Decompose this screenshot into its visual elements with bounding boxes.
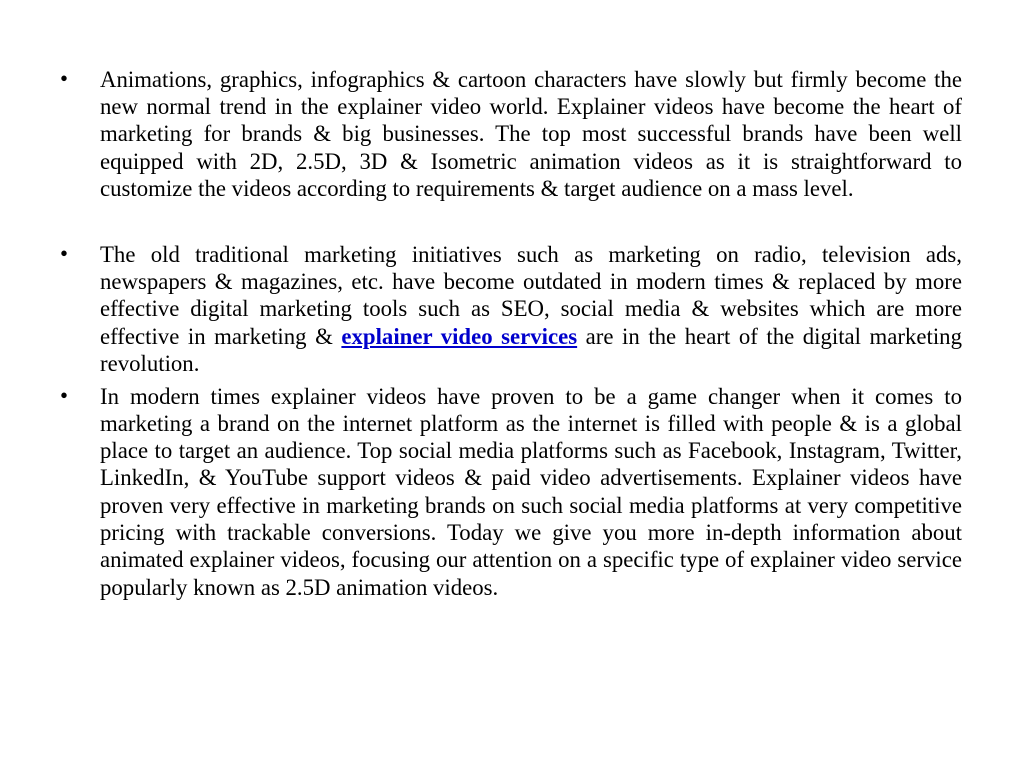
- paragraph 2 text: [100, 242, 962, 376]
- paragraph 3 text: LinkedIn, & YouTube support videos & paid video advertisements. Explainer videos have: [100, 465, 962, 490]
- paragraph 3 text: pricing with trackable conversions. Today we give you more in-depth information about: [100, 520, 962, 545]
- paragraph 3 text: [100, 384, 962, 600]
- paragraph 3 text: proven very effective in marketing brands on such social media platforms at very competitive: [100, 493, 962, 518]
- bullet marker 2: •: [60, 241, 68, 266]
- paragraph 3 text: popularly known as 2.5D animation videos.: [100, 575, 498, 600]
- paragraph 1 text: Animations, graphics, infographics & cartoon characters have slowly but firmly become the: [100, 67, 962, 92]
- paragraph 2 text: newspapers & magazines, etc. have become outdated in modern times & replaced by more: [100, 269, 962, 294]
- bullet marker 3: •: [60, 383, 68, 408]
- bullet paragraph 3: [60, 383, 962, 600]
- paragraph 1 text: customize the videos according to requirements & target audience on a mass level.: [100, 176, 854, 201]
- paragraph 3 text: animated explainer videos, focusing our attention on a specific type of explainer video service: [100, 547, 962, 572]
- paragraph 2 text: revolution.: [100, 351, 199, 376]
- paragraph 1 text: marketing for brands & big businesses. The top most successful brands have been well: [100, 121, 962, 146]
- paragraph 2 text: effective in marketing & explainer video services are in the heart of the digital marketing: [100, 324, 962, 349]
- paragraph 3 text: marketing a brand on the internet platform as the internet is filled with people & is a global: [100, 411, 962, 436]
- paragraph 3 text: In modern times explainer videos have proven to be a game changer when it comes to: [100, 384, 962, 409]
- bullet paragraph 1: [60, 66, 962, 201]
- paragraph 2 text: effective digital marketing tools such as SEO, social media & websites which are more: [100, 296, 962, 321]
- paragraph 3 text: place to target an audience. Top social media platforms such as Facebook, Instagram, Twitter,: [100, 438, 962, 463]
- paragraph 1 text: new normal trend in the explainer video world. Explainer videos have become the heart of: [100, 94, 962, 119]
- bullet marker 1: •: [60, 66, 68, 91]
- paragraph 1 text: equipped with 2D, 2.5D, 3D & Isometric animation videos as it is straightforward to: [100, 149, 962, 174]
- paragraph 2 text: The old traditional marketing initiatives such as marketing on radio, television ads,: [100, 242, 962, 267]
- paragraph 1 text: [100, 67, 962, 201]
- bullet paragraph 2: [60, 241, 962, 376]
